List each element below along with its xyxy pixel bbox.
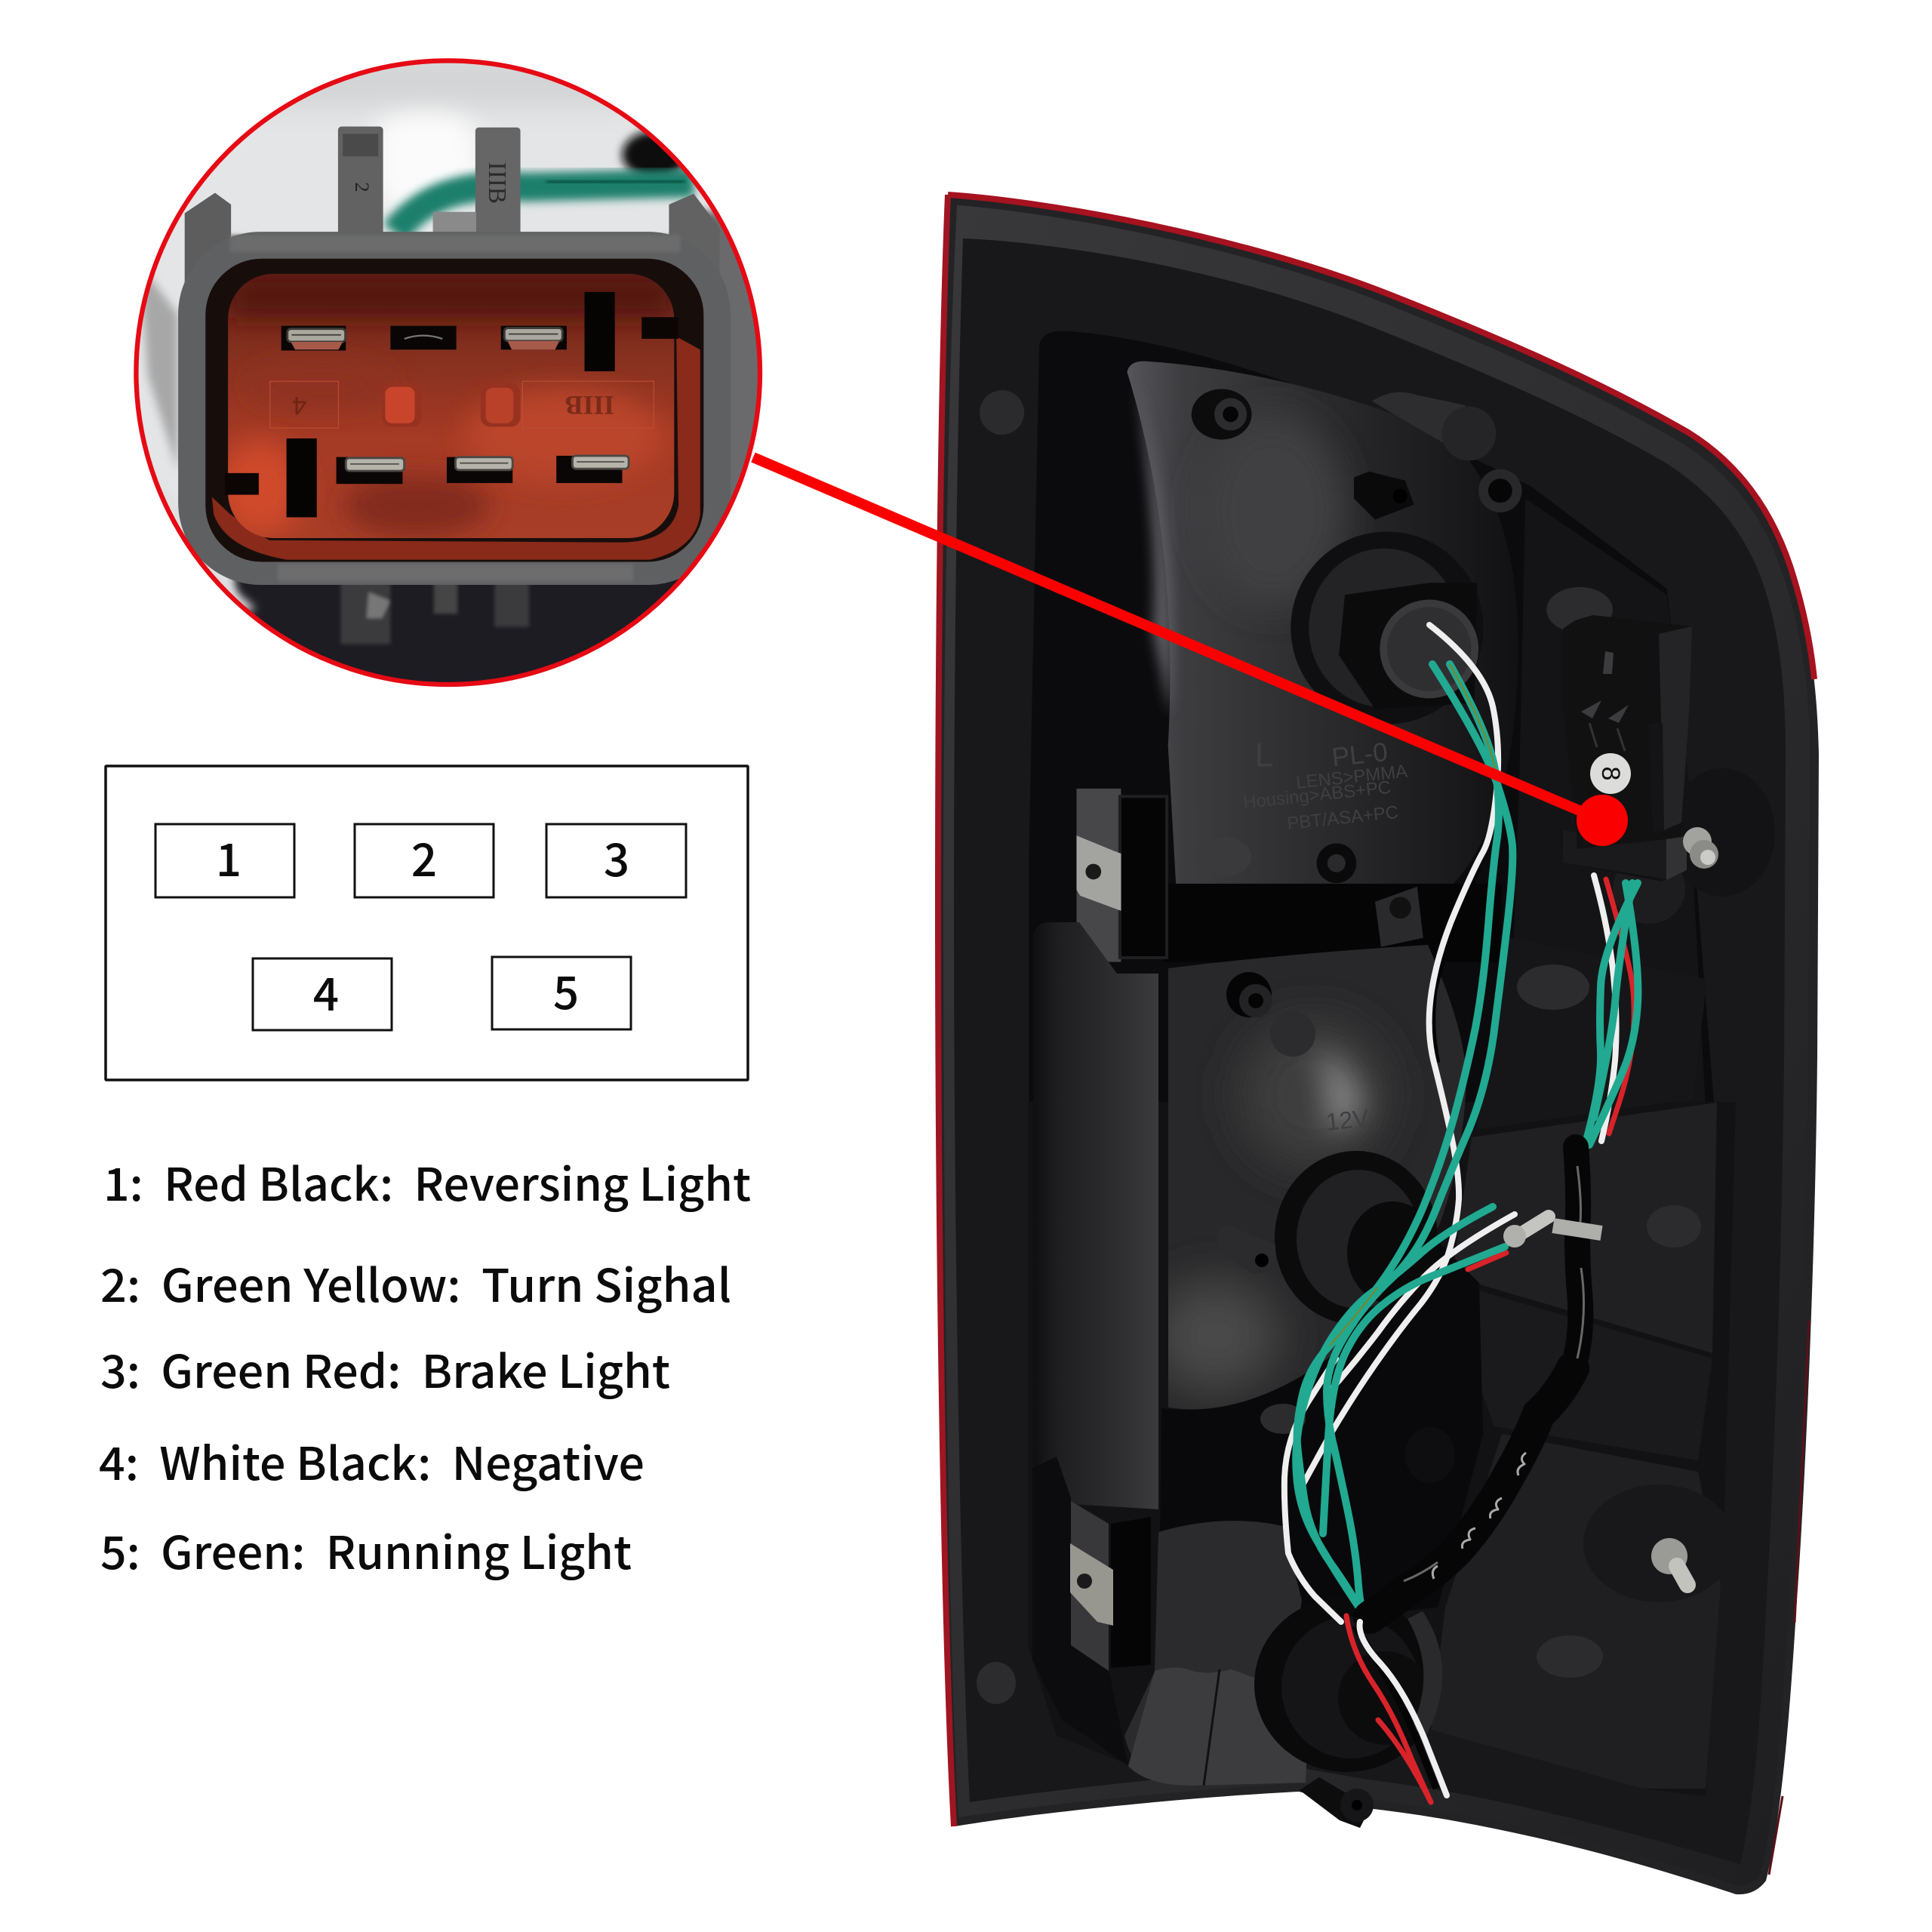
black sleeve top <box>1573 1147 1580 1368</box>
post near 12V <box>1226 972 1272 1017</box>
legend line 4: 4: White Black: Negative <box>99 1428 645 1494</box>
top slots and pins <box>281 326 567 350</box>
upper bulb socket <box>1291 531 1484 724</box>
upper mounting bolt <box>1683 827 1718 869</box>
glow lower left <box>217 441 304 536</box>
bottom legs <box>340 580 529 645</box>
screw post right <box>1478 469 1522 512</box>
red tip <box>1468 1253 1506 1269</box>
embossed IIIB: IIIB <box>565 390 614 420</box>
ring below plug <box>1613 854 1685 924</box>
oval recess behind bolt <box>1669 768 1775 897</box>
panel: pin layout diagram <box>106 766 748 1080</box>
right bump <box>481 383 521 426</box>
short teal wire bottom <box>1323 1247 1505 1534</box>
plate glow and shade <box>217 274 674 536</box>
upper half of the lamp body <box>980 331 1715 1117</box>
wire shade <box>546 180 685 183</box>
short teal wire top <box>1296 1207 1493 1612</box>
green wire <box>395 183 694 232</box>
right side tab <box>669 193 720 272</box>
upper right panel <box>1476 937 1707 1130</box>
centre stub <box>433 211 476 232</box>
top shadow <box>228 274 674 317</box>
vertical slot top <box>585 292 615 371</box>
bolt recess lower <box>1583 1484 1734 1602</box>
embossed housing text <box>1242 737 1408 834</box>
soft patch near 12V <box>1238 1019 1389 1170</box>
pin box 1 <box>155 824 294 897</box>
plug side mid shade <box>1649 723 1664 834</box>
embossed housing text: PBT/ASA+PC <box>1286 802 1399 834</box>
shade left <box>248 362 395 406</box>
outer frame <box>106 766 748 1080</box>
connector photo <box>139 63 758 682</box>
pin box 5 <box>492 957 631 1029</box>
pin box 2 <box>355 824 494 897</box>
middle right panel <box>1452 1103 1717 1353</box>
dark band below housing <box>1164 884 1501 962</box>
lens rib <box>1204 1669 1220 1786</box>
tail light flange <box>943 205 1810 1885</box>
cap disc <box>1405 1427 1455 1483</box>
dark inner socket <box>205 259 703 562</box>
embossed housing text: PL-0 <box>1331 737 1389 772</box>
red plate <box>228 274 674 538</box>
right bundle teal 1 <box>1587 883 1638 1137</box>
embossed 4: 4 <box>292 391 306 420</box>
plug body <box>1561 615 1692 881</box>
bottom bulb socket <box>1254 1597 1442 1772</box>
red rim along top edge <box>948 195 1814 679</box>
housing bottom shade <box>278 564 633 581</box>
legend line 3: 3: Green Red: Brake Light <box>100 1336 670 1401</box>
black sleeve crumpled <box>1370 1368 1573 1617</box>
bottom red wire <box>1346 1616 1431 1802</box>
legend line 2: 2: Green Yellow: Turn Sighal <box>100 1250 731 1315</box>
red sliver lower right <box>1769 1321 1809 1875</box>
pin box 4 <box>253 958 392 1030</box>
mesh mark top left <box>980 390 1024 435</box>
plug connector <box>1561 615 1718 881</box>
cap post <box>1372 392 1496 460</box>
cable tie band <box>1553 1226 1601 1233</box>
panel: connector close-up circle <box>134 58 762 687</box>
screw post lower <box>1317 844 1356 883</box>
bottom white wire <box>1360 1622 1447 1795</box>
legend line 5: 5: Green: Running Light <box>100 1517 632 1583</box>
pin box 2: 2 <box>411 824 437 890</box>
pin box 1: 1 <box>216 824 242 890</box>
housing highlight <box>1201 414 1345 607</box>
mesh mark middle <box>1198 838 1252 876</box>
white main wire <box>1300 625 1498 1491</box>
bottom dark <box>227 578 679 682</box>
black wire beside white <box>1433 868 1479 1063</box>
cable tie arm <box>1517 1217 1549 1236</box>
teal main wire 2 <box>1297 664 1499 1619</box>
bottom thin red wire <box>1378 1720 1431 1802</box>
bottom right panel <box>1431 1434 1721 1789</box>
tie bolt <box>1503 1225 1526 1247</box>
peg <box>1354 472 1414 520</box>
upper mounting tab <box>1076 789 1167 962</box>
lower left glow <box>1151 1279 1279 1392</box>
olive stripe <box>1330 664 1495 1346</box>
lower bay <box>1158 1238 1483 1660</box>
plug bracket side <box>1666 836 1687 880</box>
lower red skirt <box>212 337 700 560</box>
lower right panel <box>1452 1283 1712 1460</box>
dark blob <box>622 131 688 179</box>
plug markings <box>1581 651 1629 723</box>
legend line 1: 1: Red Black: Reversing Light <box>103 1149 751 1214</box>
left notch <box>225 473 259 495</box>
bottom black wire <box>1355 1626 1436 1789</box>
top grey haze <box>288 63 607 117</box>
side peg <box>1217 1224 1275 1274</box>
blade 2: 2 <box>351 182 374 192</box>
tail light outer body <box>936 193 1819 1894</box>
lower housing highlights <box>1151 1019 1389 1392</box>
pin box 4: 4 <box>313 958 339 1024</box>
middle bulb socket <box>1275 1151 1438 1324</box>
bright patch near 12V <box>1313 1053 1362 1126</box>
vertical slot bottom <box>287 438 317 517</box>
housing top shade <box>230 235 681 252</box>
blade 2 <box>338 127 383 239</box>
right bundle teal 2 <box>1589 883 1638 1145</box>
glow middle right <box>464 389 663 484</box>
plug right side <box>1659 626 1692 830</box>
lower housing <box>1168 945 1466 1409</box>
red circle ring <box>136 60 760 685</box>
bottom-left light <box>223 583 260 616</box>
tail light inner face <box>954 238 1786 1864</box>
left side tab <box>184 193 231 282</box>
pin box 5: 5 <box>553 957 579 1023</box>
wiring harness <box>1284 625 1775 1802</box>
thick white wire <box>1332 1214 1515 1389</box>
housing left shine <box>1137 384 1173 715</box>
callout dot <box>1577 795 1628 846</box>
mesh marks <box>977 964 1701 1704</box>
mesh mark right <box>1546 587 1613 632</box>
pin box 3 <box>546 824 686 897</box>
right grey <box>702 205 758 500</box>
grey housing <box>178 232 731 585</box>
pin box 3: 3 <box>604 824 629 890</box>
sticker with number 8: 8 <box>1596 767 1625 780</box>
screw post top <box>1192 389 1252 439</box>
crumple wrinkles <box>1432 1453 1526 1579</box>
embossed frame right <box>522 381 654 428</box>
legend: wire functions <box>99 1149 751 1583</box>
right bundle teal 3 <box>1594 883 1632 1118</box>
lower mounting bolt <box>1651 1538 1687 1585</box>
blade IIIB <box>475 128 521 240</box>
lower half of the lamp body <box>977 922 1736 1828</box>
lower housing under band <box>1124 1521 1302 1785</box>
bottom slots and pins <box>337 456 629 484</box>
embossed 12V: 12V <box>1324 1104 1371 1136</box>
shadow lower middle <box>343 475 490 536</box>
embossed frame left <box>270 381 338 428</box>
lower mounting tab <box>1070 1501 1151 1671</box>
lower recess <box>1028 1102 1736 1796</box>
light background <box>139 100 713 589</box>
right panel shading <box>1507 499 1706 1117</box>
plug bracket <box>1563 830 1666 879</box>
screw post lower right <box>1375 887 1423 947</box>
upper lamp housing <box>1127 361 1518 896</box>
left light streaks <box>140 276 178 466</box>
outer white wire <box>1284 1358 1341 1622</box>
embossed housing text: Housing>ABS+PC <box>1242 777 1392 813</box>
left panel of lower housing <box>1033 922 1158 1509</box>
embossed housing text: L <box>1254 737 1273 774</box>
wavy lens band <box>1128 1668 1309 1786</box>
lower left recess <box>1032 1457 1128 1766</box>
recessed panel <box>1029 331 1715 1117</box>
bottom post <box>1300 1777 1374 1828</box>
sticker with number 8 <box>1590 753 1631 794</box>
right notch <box>641 317 678 339</box>
bright haze <box>374 106 477 226</box>
left bump <box>382 383 422 426</box>
sleeve shine <box>1404 1166 1584 1581</box>
right bundle white <box>1594 875 1617 1141</box>
red rim along left edge <box>938 195 954 1826</box>
right bundle red <box>1606 879 1634 1134</box>
blade IIIB: IIIB <box>483 162 511 204</box>
plug latch lines <box>1589 723 1625 751</box>
embossed housing text: LENS>PMMA <box>1295 761 1408 793</box>
callout line to plug <box>753 457 1602 820</box>
teal main wire 1 <box>1327 664 1512 1621</box>
